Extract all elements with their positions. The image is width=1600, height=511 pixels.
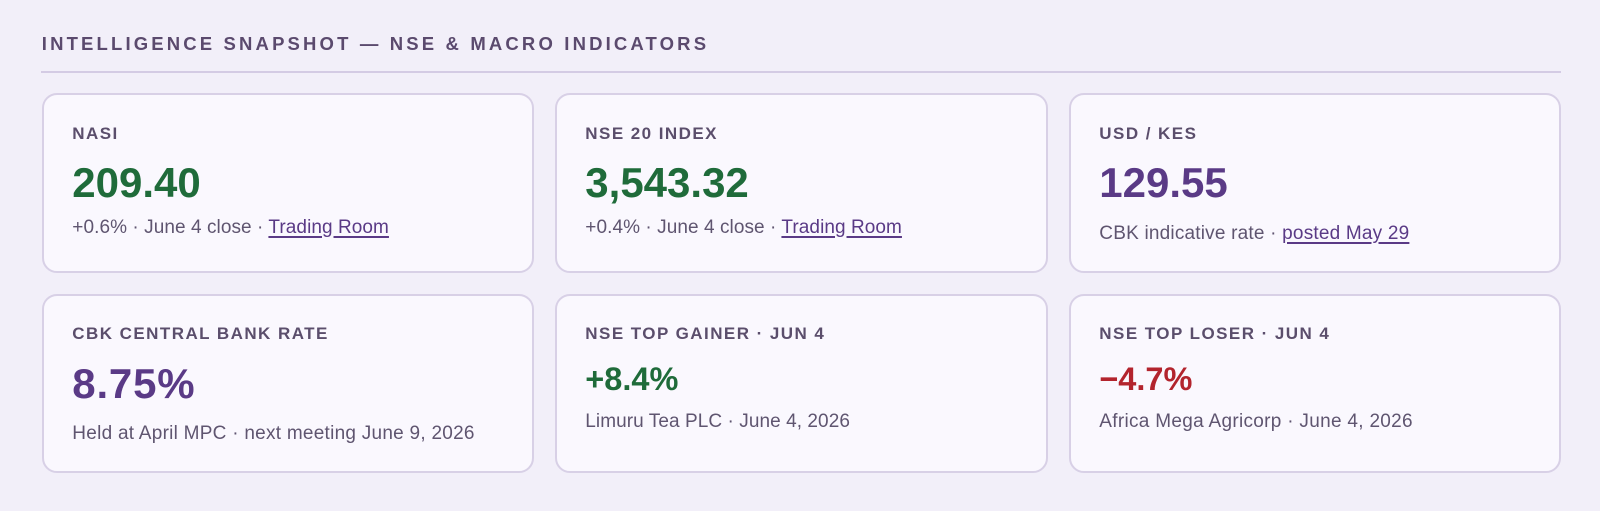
- panel: CBK central bank rate: [42, 294, 534, 473]
- value: NASI: 209.40: [72, 159, 201, 206]
- label: CBK central bank rate: CBK CENTRAL BANK RATE: [72, 324, 329, 343]
- panel: NSE 20 index: [554, 93, 1048, 272]
- label: NASI: NASI: [72, 124, 119, 143]
- value: USD / KES: 129.55: [1099, 159, 1228, 206]
- label: NSE 20 index: NSE 20 INDEX: [585, 124, 718, 143]
- note: CBK central bank rate: Held at April MPC · next meeting June 9, 2026: [72, 422, 475, 444]
- label: NSE top loser: NSE TOP LOSER · JUN 4: [1099, 324, 1330, 343]
- note: NSE top loser: Africa Mega Agricorp · June 4, 2026: [1099, 410, 1413, 432]
- value: CBK central bank rate: 8.75%: [72, 360, 195, 407]
- value: NSE top loser: −4.7%: [1099, 361, 1192, 397]
- panel: NSE top gainer: [554, 294, 1048, 473]
- note: USD / KES: CBK indicative rate · posted May 29: [1099, 223, 1409, 244]
- title: INTELLIGENCE SNAPSHOT — NSE & MACRO INDICATORS: [42, 33, 709, 54]
- value: NSE 20 index: 3,543.32: [585, 159, 749, 206]
- value: NSE top gainer: +8.4%: [585, 361, 678, 397]
- label: USD / KES: USD / KES: [1099, 124, 1197, 143]
- panel: NSE top loser: [1068, 294, 1561, 473]
- label: NSE top gainer: NSE TOP GAINER · JUN 4: [585, 324, 825, 343]
- note: NASI: +0.6% · June 4 close · Trading Room: [72, 217, 389, 238]
- panel: NASI: [42, 93, 534, 272]
- note: NSE 20 index: +0.4% · June 4 close · Trading Room: [585, 217, 902, 238]
- panel: USD / KES: [1068, 93, 1561, 272]
- note: NSE top gainer: Limuru Tea PLC · June 4, 2026: [585, 410, 850, 432]
